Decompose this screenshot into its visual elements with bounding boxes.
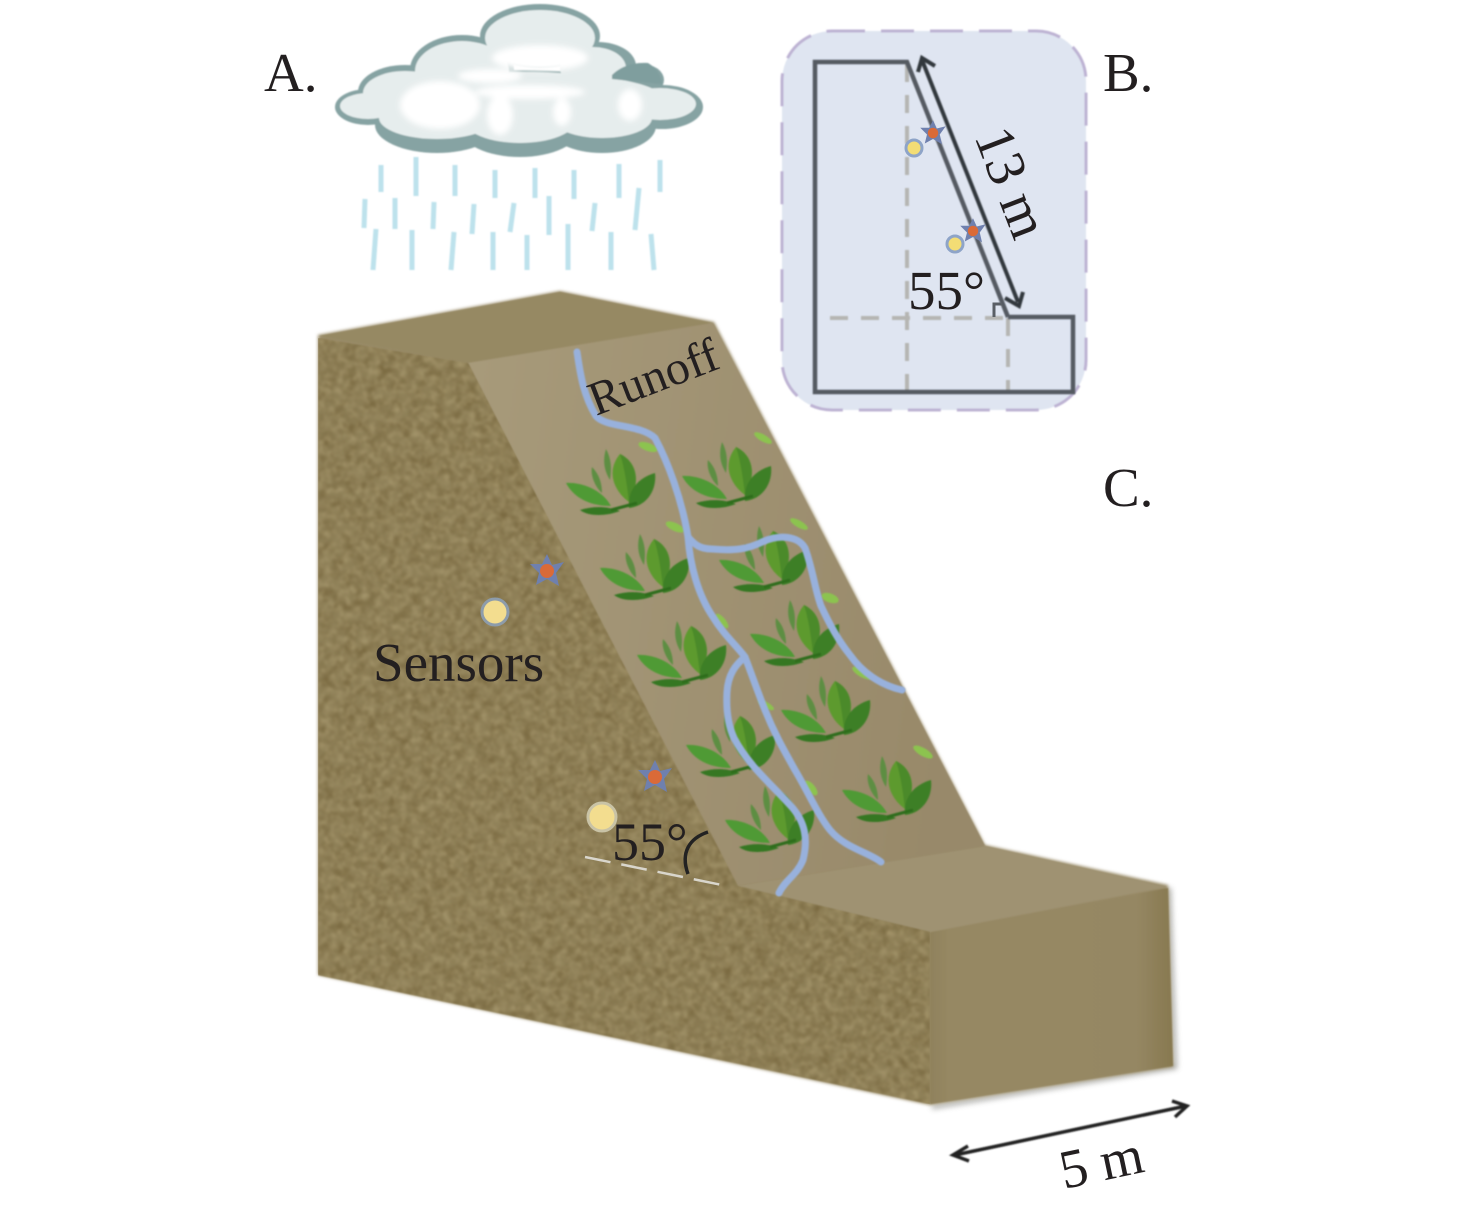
small green leaflets — [637, 430, 935, 797]
label: C: C. — [1103, 457, 1153, 518]
circle sensor — [588, 803, 616, 831]
star sensor — [530, 554, 564, 586]
inset angle tick — [994, 304, 1002, 317]
plant — [686, 711, 775, 777]
leaflet — [664, 519, 686, 535]
plant — [781, 676, 870, 742]
slope surface — [468, 323, 985, 886]
angle text: 55° — [612, 812, 688, 872]
icon: rain cloud — [335, 4, 703, 270]
plant — [842, 756, 931, 822]
label: A: A. — [264, 42, 317, 103]
label: B: B. — [1103, 42, 1153, 103]
leaflet — [637, 440, 659, 454]
star sensor — [638, 760, 672, 792]
inset circle — [906, 140, 922, 156]
hillslope block — [318, 291, 1175, 1107]
inset label: 55 degrees: 55° — [908, 260, 985, 321]
plant — [566, 449, 655, 515]
guide lines — [830, 64, 1008, 392]
leaflet — [789, 516, 809, 532]
inset background — [782, 31, 1086, 410]
plant — [682, 442, 771, 508]
plant — [637, 621, 726, 687]
cloud — [335, 4, 703, 157]
plant — [725, 786, 814, 852]
label: 5 m: 5 m — [1054, 1124, 1149, 1201]
circle sensor — [482, 599, 508, 625]
width arrow — [953, 1101, 1187, 1161]
rain — [364, 157, 660, 270]
leaflet — [753, 430, 773, 446]
plant — [719, 526, 808, 592]
top of hill — [319, 292, 713, 363]
runoff streams — [577, 352, 902, 893]
plant — [600, 534, 689, 600]
right face shadow — [932, 888, 1175, 1107]
lower shelf top — [736, 846, 1167, 932]
reference dashed line — [585, 857, 722, 885]
cross-section outline — [815, 62, 1073, 392]
side soil face — [318, 338, 930, 1104]
block silhouette — [318, 291, 1173, 1105]
inset circle — [947, 236, 963, 252]
inset label: 13 m: 13 m — [962, 118, 1060, 247]
leaflet — [802, 779, 820, 797]
angle arc — [685, 832, 708, 874]
label: Sensors: Sensors — [373, 632, 544, 693]
inset star — [920, 120, 946, 144]
right end face — [930, 888, 1173, 1104]
plants — [566, 442, 931, 852]
leaflet — [820, 591, 840, 605]
leaflet — [757, 698, 775, 712]
inset star — [960, 218, 986, 242]
label: Runoff: Runoff — [581, 328, 726, 426]
sensors: soil moisture stars — [530, 554, 672, 792]
length arrow — [918, 58, 1023, 306]
panel: inset cross-section — [782, 31, 1086, 410]
leaflet — [714, 612, 730, 630]
leaflet — [911, 743, 935, 761]
plant — [750, 600, 839, 666]
leaflet — [850, 664, 874, 682]
sensors: circles — [482, 599, 616, 831]
slope angle marker — [585, 812, 722, 885]
